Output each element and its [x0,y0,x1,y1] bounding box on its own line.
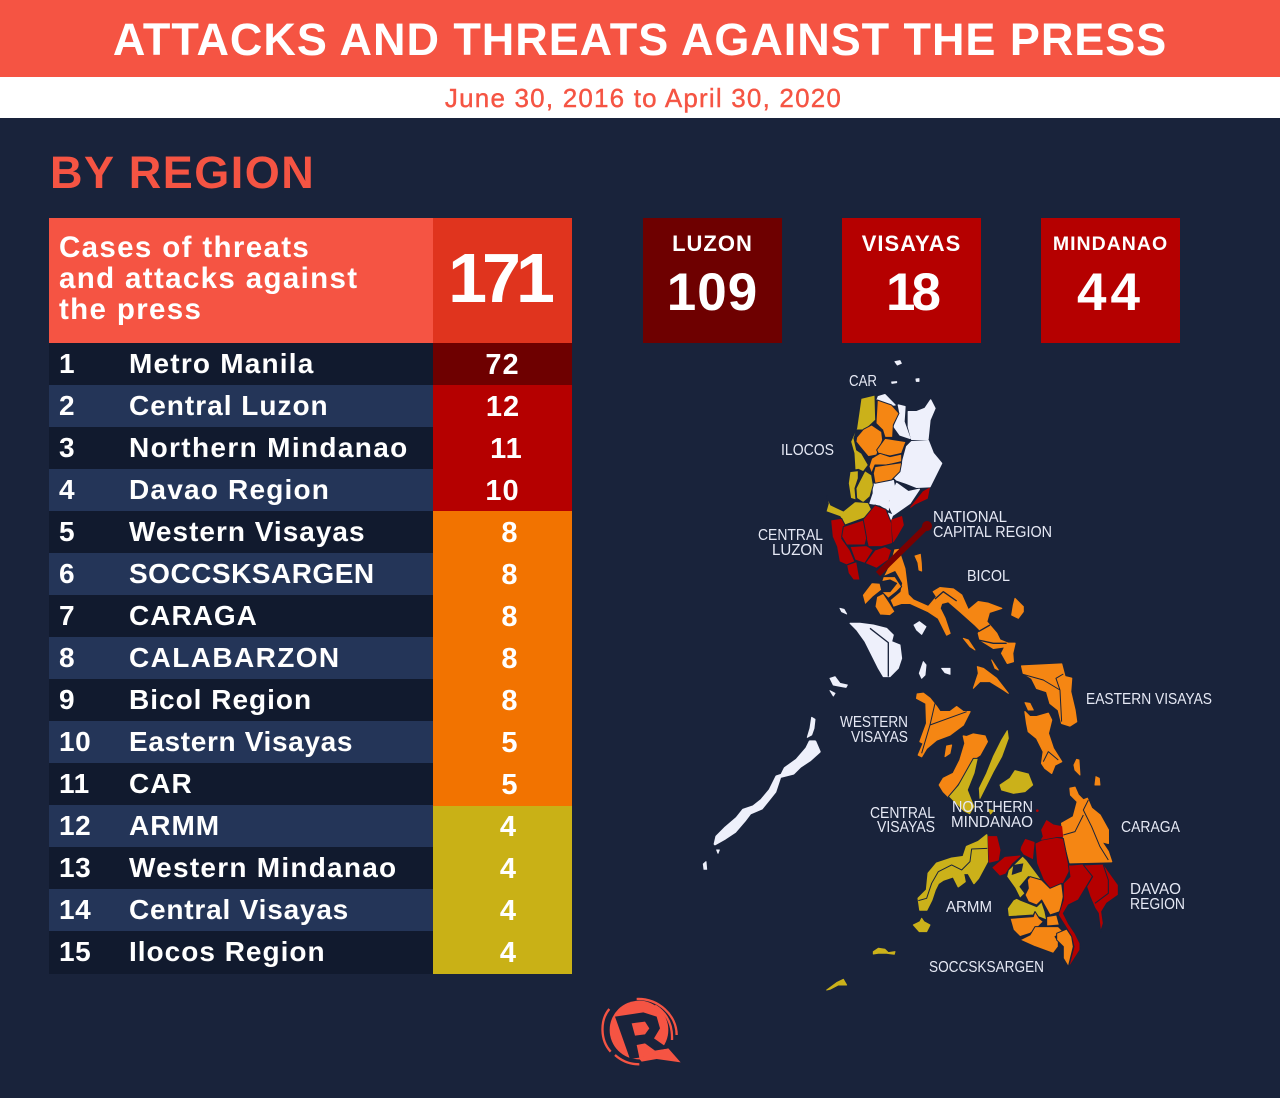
row 8: 8 [59,642,75,673]
Ifugao [869,453,902,473]
Misamis Oriental [1042,821,1063,839]
table header label [59,231,358,326]
Cotabato [1025,877,1063,915]
Masbate [973,667,1008,693]
row 7: 8 [501,601,519,633]
row 12: 12 [59,810,91,841]
Laguna [882,577,902,598]
title banner: ATTACKS AND THREATS AGAINST THE PRESS [113,14,1167,65]
row 9: Bicol Region [129,684,312,715]
row 5: 5 [59,516,75,547]
Ticao [992,660,998,670]
row 14: 14 [59,894,91,925]
stat: Mindanao [1041,218,1180,343]
Lanao del Sur [1007,856,1042,898]
Polillo [915,554,922,571]
label: ARMM: ARMM [946,899,992,916]
row 2 [49,385,572,427]
row 5: 8 [501,517,519,549]
Davao del Sur [1058,864,1093,968]
Benguet [873,463,902,483]
Davao Oriental [1083,864,1118,932]
Northern Palawan [807,717,815,737]
label: Central Visayas line 2: VISAYAS [877,819,935,836]
row 6 [49,553,572,595]
Pampanga [850,546,873,563]
stat: Luzon: 109 [667,263,758,322]
Sultan Kudarat [1010,912,1043,937]
Apayao [876,400,899,437]
Benguet yellow [856,471,873,503]
stat: Visayas: 18 [886,263,937,322]
row 11: CAR [129,768,193,799]
Palawan [715,742,819,844]
Panay dividers [922,703,967,753]
Guimaras [945,745,952,757]
Sarangani [1057,929,1073,967]
Aurora [892,517,903,542]
Leyte divider [1043,752,1058,762]
row 8 [49,637,572,679]
Iligan arm [993,856,1020,875]
Mindoro [850,623,902,677]
Calamian and other islets [703,677,847,869]
row 14 [49,889,572,932]
row 10: 5 [501,727,519,759]
Bicol dividers [935,592,1007,643]
logo disc [610,1001,668,1059]
Sulu [873,948,895,954]
row 3: 11 [490,433,523,465]
label: Western: WESTERN [840,714,908,731]
Negros Oriental [948,758,978,815]
row 2: 12 [486,391,520,423]
row 4: 10 [485,475,520,507]
region ranking table [49,343,572,974]
row 9 [49,679,572,721]
Samar [1022,664,1077,726]
Samar dividers [1022,674,1063,722]
row 15: Ilocos Region [129,936,326,967]
date subtitle [0,77,1280,118]
label: CAR: CAR [849,373,877,390]
row 11: 11 [59,768,90,799]
row 10: 10 [59,726,91,757]
Tarlac [842,520,867,545]
Aurora north tip [911,488,929,507]
callout stroke [878,527,926,574]
Maguindanao [1007,898,1047,920]
Misamis Occidental [988,837,1000,862]
Panay [917,693,970,757]
row 5: Western Visayas [129,516,366,547]
row 7 [49,595,572,637]
Pangasinan [826,496,873,525]
row 9: 8 [501,685,519,717]
callout dot [922,521,932,531]
Siquijor [988,809,993,814]
Cebu [979,731,1008,798]
map: Bicol and northern Visayas [900,588,1023,693]
Basilan [913,918,930,932]
Cagayan Valley [870,395,942,520]
label: Central Visayas line 1: CENTRAL [870,805,935,822]
Ilocos north [851,395,876,472]
stat: Luzon [643,218,782,343]
Marinduque [914,622,926,634]
northern islets [892,361,919,383]
label: Caraga: CARAGA [1121,819,1180,836]
Lanao del Norte [1020,838,1035,860]
Dinagat [1074,759,1080,775]
row 14: Central Visayas [129,894,349,925]
label: Luzon: LUZON [772,542,823,559]
Zambales [831,518,855,565]
row 1: 1 [59,348,75,379]
table header label: Cases of threats [59,231,310,264]
Cavite Batangas [862,583,882,605]
row 1: 72 [485,349,520,381]
total number [433,218,572,343]
label: Capital Region: CAPITAL REGION [933,524,1052,541]
stat: Luzon: LUZON [672,231,753,256]
Negros Occidental [939,734,987,797]
row 8: CALABARZON [129,642,341,673]
row 4: Davao Region [129,474,330,505]
row 11: 5 [501,769,519,801]
Lubang [840,608,847,614]
General Santos [1047,915,1059,926]
row 2: 2 [59,390,75,421]
row 12 [49,805,572,848]
row 13: Western Mindanao [129,852,397,883]
row 7: CARAGA [129,600,258,631]
row 7: 7 [59,600,75,631]
row 6: 8 [501,559,519,591]
logo letter R [615,1012,668,1059]
total number: 171 [448,239,550,317]
table header label: and attacks against [59,262,358,295]
row 12: 4 [500,811,517,843]
row 14: 4 [500,895,517,927]
stat: Visayas: VISAYAS [862,231,961,256]
row 6: 6 [59,558,75,589]
Abra [856,425,883,457]
map: Palawan, Visayas and western Mindanao [703,664,1100,990]
Leyte [1025,712,1062,773]
label: National: NATIONAL [933,509,1007,526]
stat: Mindanao: 44 [1077,263,1144,322]
table header: total cases [49,218,572,343]
logo tail [639,1048,681,1062]
row 9: 9 [59,684,75,715]
row 1 [49,343,572,385]
label: Mindanao: MINDANAO [951,814,1033,831]
Burias [963,638,975,650]
Bohol [1000,771,1033,793]
logo: Rappler [602,999,681,1064]
La Union [848,471,858,500]
row 15 [49,931,572,974]
row 3: Northern Mindanao [129,432,409,463]
Camiguin [1036,809,1039,812]
Caraga [1062,787,1112,863]
NCR callout [878,521,932,574]
map: eastern Mindanao [993,787,1118,968]
label: Ilocos: ILOCOS [781,442,834,459]
row 12: ARMM [129,810,220,841]
Western Mindanao division [918,848,987,901]
Davao divider [1095,865,1108,903]
Lake Lanao [1012,863,1023,875]
row 2: Central Luzon [129,390,329,421]
Mountain Province [877,438,906,456]
row 11 [49,763,572,806]
label: Eastern Visayas: EASTERN VISAYAS [1086,691,1212,708]
Bukidnon [1035,837,1070,888]
Romblon [919,662,950,678]
Caraga dividers [1063,800,1108,860]
Western Mindanao [918,835,987,910]
Mindoro divide [870,628,888,677]
row 15: 4 [500,937,517,969]
label: Region: REGION [1130,896,1185,913]
row 8: 8 [501,643,519,675]
Siargao [1095,777,1100,785]
Nueva Ecija [863,505,893,547]
title banner [0,0,1280,77]
row 15: 15 [59,936,91,967]
label: Bicol: BICOL [967,568,1010,585]
label: Visayas west: VISAYAS [851,729,908,746]
label: Davao: DAVAO [1130,881,1181,898]
Tawi-Tawi [827,979,847,990]
row 10: Eastern Visayas [129,726,353,757]
stat: Visayas [842,218,981,343]
Bicol [900,588,1015,663]
row 13: 4 [500,853,517,885]
row 6: SOCCSKSARGEN [129,558,375,589]
logo outer rings [602,999,677,1064]
section heading: BY REGION [50,147,315,198]
row 5 [49,511,572,553]
row 1: Metro Manila [129,348,315,379]
row 4: 4 [59,474,75,505]
Bataan [847,562,860,580]
Bulacan [865,547,892,568]
row 13: 13 [59,852,91,883]
table header label: the press [59,293,202,326]
row 3: 3 [59,432,75,463]
label: Northern: NORTHERN [952,799,1033,816]
Quezon [883,548,909,607]
Catanduanes [1012,598,1023,618]
Batangas south [875,593,895,616]
stat: Mindanao: MINDANAO [1053,233,1168,255]
South Cotabato [1020,927,1063,953]
Biliran [1025,703,1033,710]
map labels [758,373,1212,976]
row 10 [49,721,572,763]
map: Luzon [826,361,942,677]
label: Soccsksargen: SOCCSKSARGEN [929,959,1044,976]
row 13 [49,847,572,890]
date subtitle: June 30, 2016 to April 30, 2020 [445,83,842,113]
row 4 [49,469,572,511]
row 3 [49,427,572,469]
label: Central: CENTRAL [758,527,823,544]
